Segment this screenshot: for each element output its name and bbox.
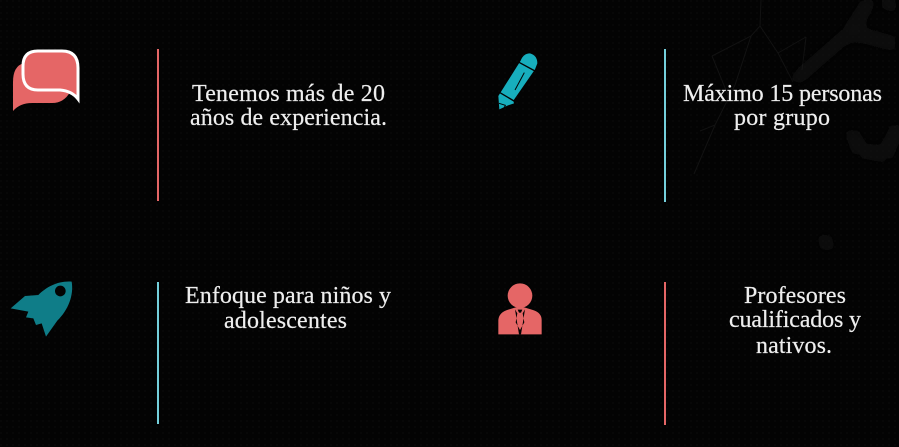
divider line: experience — [157, 49, 159, 201]
text: group size: Máximo 15 personas — [683, 81, 882, 107]
text: teachers: nativos. — [756, 333, 832, 359]
icon: rocket — [11, 282, 72, 337]
text: experience: Tenemos más de 20 — [192, 81, 385, 107]
text: focus — [185, 283, 391, 334]
panel: teachers — [498, 282, 861, 425]
text: experience — [190, 81, 387, 131]
text: experience: años de experiencia. — [190, 105, 387, 131]
text: focus: Enfoque para niños y — [185, 283, 391, 309]
divider line: teachers — [664, 282, 666, 425]
text: teachers — [729, 283, 861, 359]
background network texture — [694, 0, 899, 250]
icon: pencil — [498, 53, 537, 109]
divider line: group size — [664, 49, 666, 202]
text: teachers: cualificados y — [729, 307, 861, 333]
icon: speech bubbles — [13, 51, 78, 111]
icon: person in suit — [498, 283, 542, 334]
divider line: focus — [157, 282, 159, 424]
text: group size — [683, 81, 882, 131]
panel: group size — [498, 49, 882, 202]
panel: focus — [11, 282, 391, 424]
text: teachers: Profesores — [744, 283, 846, 309]
panel: experience — [13, 49, 387, 201]
text: focus: adolescentes — [224, 308, 347, 334]
text: group size: por grupo — [734, 105, 830, 131]
